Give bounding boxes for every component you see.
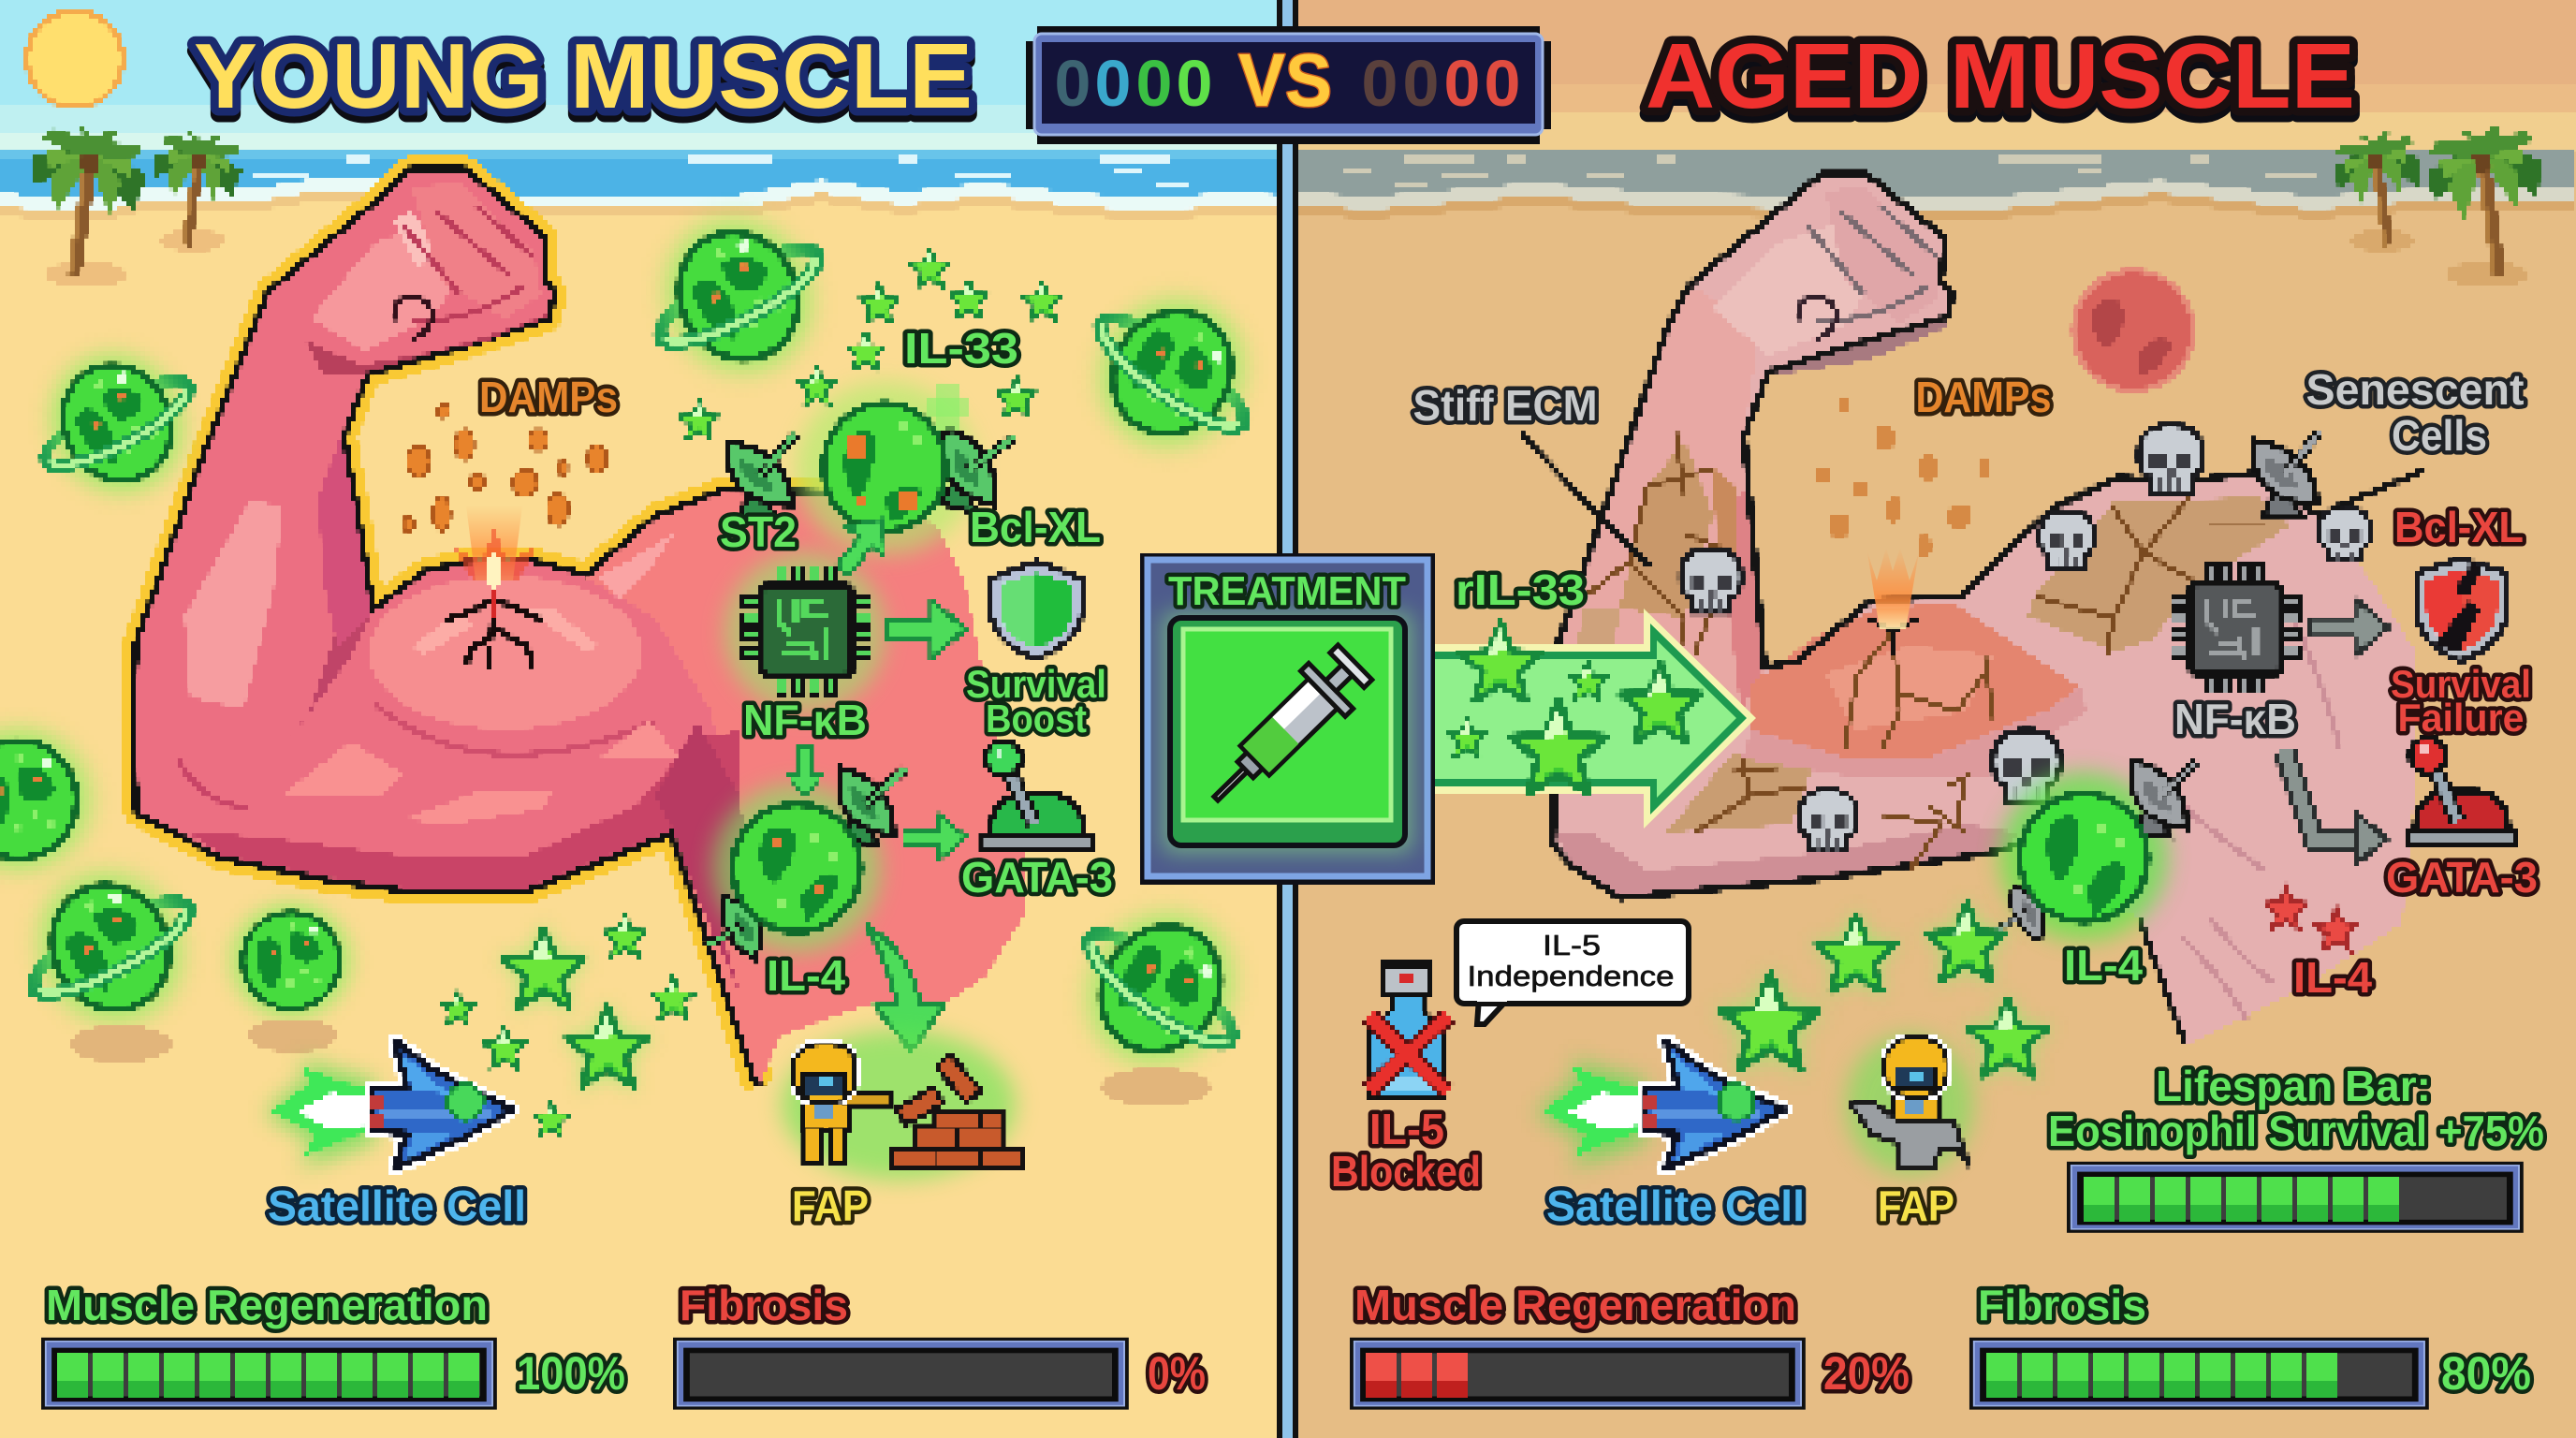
IL-5 blocked bottle xyxy=(1368,964,1447,1097)
muscle injury volcano: aged xyxy=(1867,548,1919,629)
DAMPs debris: young xyxy=(403,404,607,532)
satellite cell ship and stars: young xyxy=(266,915,695,1168)
icon: syringe xyxy=(1193,639,1377,821)
lifespan bar: eosinophil survival +75%: Lifespan Bar: xyxy=(2156,1062,2431,1110)
treatment arrow with rIL-33 stars xyxy=(1435,609,1756,829)
title: aged muscle: AGED MUSCLE xyxy=(1646,24,2355,127)
IL-4 cell: aged xyxy=(1996,753,2197,946)
icon: cracked shield xyxy=(2417,559,2507,661)
glow zones on muscle xyxy=(712,382,976,952)
icon: GATA-3 lever xyxy=(983,741,1091,848)
labels: young pathway: IL-4 xyxy=(767,951,845,1000)
scoreboard: VS: 0000 xyxy=(1362,47,1520,120)
labels: young pathway: Satellite Cell xyxy=(268,1181,526,1230)
progress bar: aged muscle regeneration 20% xyxy=(1350,1281,1910,1410)
labels: young pathway: GATA-3 xyxy=(961,853,1113,902)
NF-kB chip: young xyxy=(743,566,871,694)
labels: young pathway: DAMPs xyxy=(479,373,618,421)
progress bar: young muscle regeneration 100%: Muscle Regeneration xyxy=(46,1281,488,1329)
sky and sand background: young xyxy=(0,0,1277,1438)
label: treatment: TREATMENT xyxy=(1168,568,1406,614)
icon: GATA-3 lever broken xyxy=(2408,738,2516,845)
scoreboard: VS: 0000 xyxy=(1055,47,1212,120)
speech bubble: IL-5 independence xyxy=(1456,921,1689,1024)
ocean: young xyxy=(0,150,1277,221)
grey receptor dish and pointer xyxy=(1520,433,2425,566)
progress bar: aged fibrosis 80%: Fibrosis xyxy=(1978,1281,2146,1329)
progress bar: young muscle regeneration 100%: 100% xyxy=(517,1347,625,1400)
floating eosinophil cells: young xyxy=(0,186,1286,1106)
palm trees: aged xyxy=(2329,118,2556,287)
labels: young pathway: FAP xyxy=(792,1181,869,1230)
muscle: strong flexed arm xyxy=(136,172,1026,1086)
speech bubble: IL-5 independence: IL-5 xyxy=(1543,929,1601,961)
center divider xyxy=(1277,0,1298,1438)
pathway arrows: young xyxy=(787,505,966,1050)
DAMPs debris: aged xyxy=(1815,397,1990,557)
labels: young pathway: Bcl-XL xyxy=(970,503,1101,551)
labels: young pathway: IL-33 xyxy=(904,324,1018,373)
labels: aged pathway: Stiff ECM xyxy=(1413,381,1597,430)
progress bar: young fibrosis 0%: 0% xyxy=(1148,1347,1206,1400)
red IL-4 stars xyxy=(2265,888,2357,949)
progress bar: young fibrosis 0% xyxy=(673,1281,1206,1410)
labels: aged pathway: Cells xyxy=(2392,411,2487,460)
labels: aged pathway: Senescent xyxy=(2306,365,2524,414)
labels: young pathway: Boost xyxy=(986,697,1087,741)
labels: aged pathway: IL-4 xyxy=(2293,953,2372,1002)
progress bar: young muscle regeneration 100% xyxy=(41,1281,625,1410)
lifespan bar: eosinophil survival +75% xyxy=(2048,1062,2544,1233)
labels: aged pathway: GATA-3 xyxy=(2386,853,2538,902)
labels: aged pathway: Blocked xyxy=(1331,1147,1481,1196)
icon: Bcl-XL shield xyxy=(990,562,1082,658)
labels: aged pathway xyxy=(1331,365,2538,1230)
FAP builder with bricks xyxy=(782,1030,1024,1180)
labels: aged pathway: NF-κB xyxy=(2174,695,2296,743)
progress bar: aged muscle regeneration 20%: Muscle Regeneration xyxy=(1354,1281,1796,1329)
scoreboard: VS xyxy=(1026,26,1551,144)
labels: aged pathway: Survival xyxy=(2391,662,2531,706)
labels: young pathway: ST2 xyxy=(720,507,797,556)
labels: aged pathway: Satellite Cell xyxy=(1546,1181,1805,1230)
labels: young pathway xyxy=(268,324,1113,1230)
progress bar: aged muscle regeneration 20%: 20% xyxy=(1823,1347,1910,1400)
panel: young muscle xyxy=(0,0,1286,1438)
IL-33 stars: young xyxy=(680,248,1062,439)
progress bar: young fibrosis 0%: Fibrosis xyxy=(680,1281,848,1329)
panel: aged muscle xyxy=(1298,0,2576,1438)
label: rIL-33: rIL-33 xyxy=(1456,565,1585,614)
central IL-33 cell with ST2 receptors xyxy=(727,386,1014,531)
progress bar: aged fibrosis 80%: 80% xyxy=(2441,1347,2531,1400)
title: young muscle: YOUNG MUSCLE xyxy=(194,24,973,127)
IL-4 cell: young xyxy=(705,760,904,964)
muscle: wasted aged arm xyxy=(1553,174,2415,1045)
labels: young pathway: Survival xyxy=(966,662,1106,706)
sky and sand background: aged xyxy=(1298,0,2576,1438)
labels: young pathway: NF-κB xyxy=(743,696,867,744)
speech bubble: IL-5 independence: Independence xyxy=(1468,960,1674,992)
pathway arrows: aged xyxy=(2284,599,2389,863)
satellite cell ship, FAP and stars: aged xyxy=(1537,899,2054,1175)
muscle injury volcano: young xyxy=(446,506,542,670)
lifespan bar: eosinophil survival +75%: Eosinophil Survival +75% xyxy=(2048,1107,2544,1155)
panel: treatment xyxy=(1140,553,1435,885)
sun xyxy=(27,11,123,107)
ocean: aged xyxy=(1298,150,2576,219)
senescent skulls xyxy=(1681,425,2370,851)
progress bar: aged fibrosis 80% xyxy=(1969,1281,2531,1410)
NF-kB chip: aged xyxy=(2172,565,2299,693)
labels: aged pathway: Bcl-XL xyxy=(2394,503,2524,551)
palm trees: young xyxy=(18,118,246,287)
labels: aged pathway: FAP xyxy=(1878,1181,1954,1230)
labels: aged pathway: DAMPs xyxy=(1915,373,2052,421)
dead red cell xyxy=(2073,271,2193,390)
labels: aged pathway: IL-4 xyxy=(2064,941,2143,990)
labels: aged pathway: IL-5 xyxy=(1369,1105,1444,1153)
scoreboard: VS: VS xyxy=(1238,38,1332,122)
labels: aged pathway: Failure xyxy=(2398,696,2524,740)
